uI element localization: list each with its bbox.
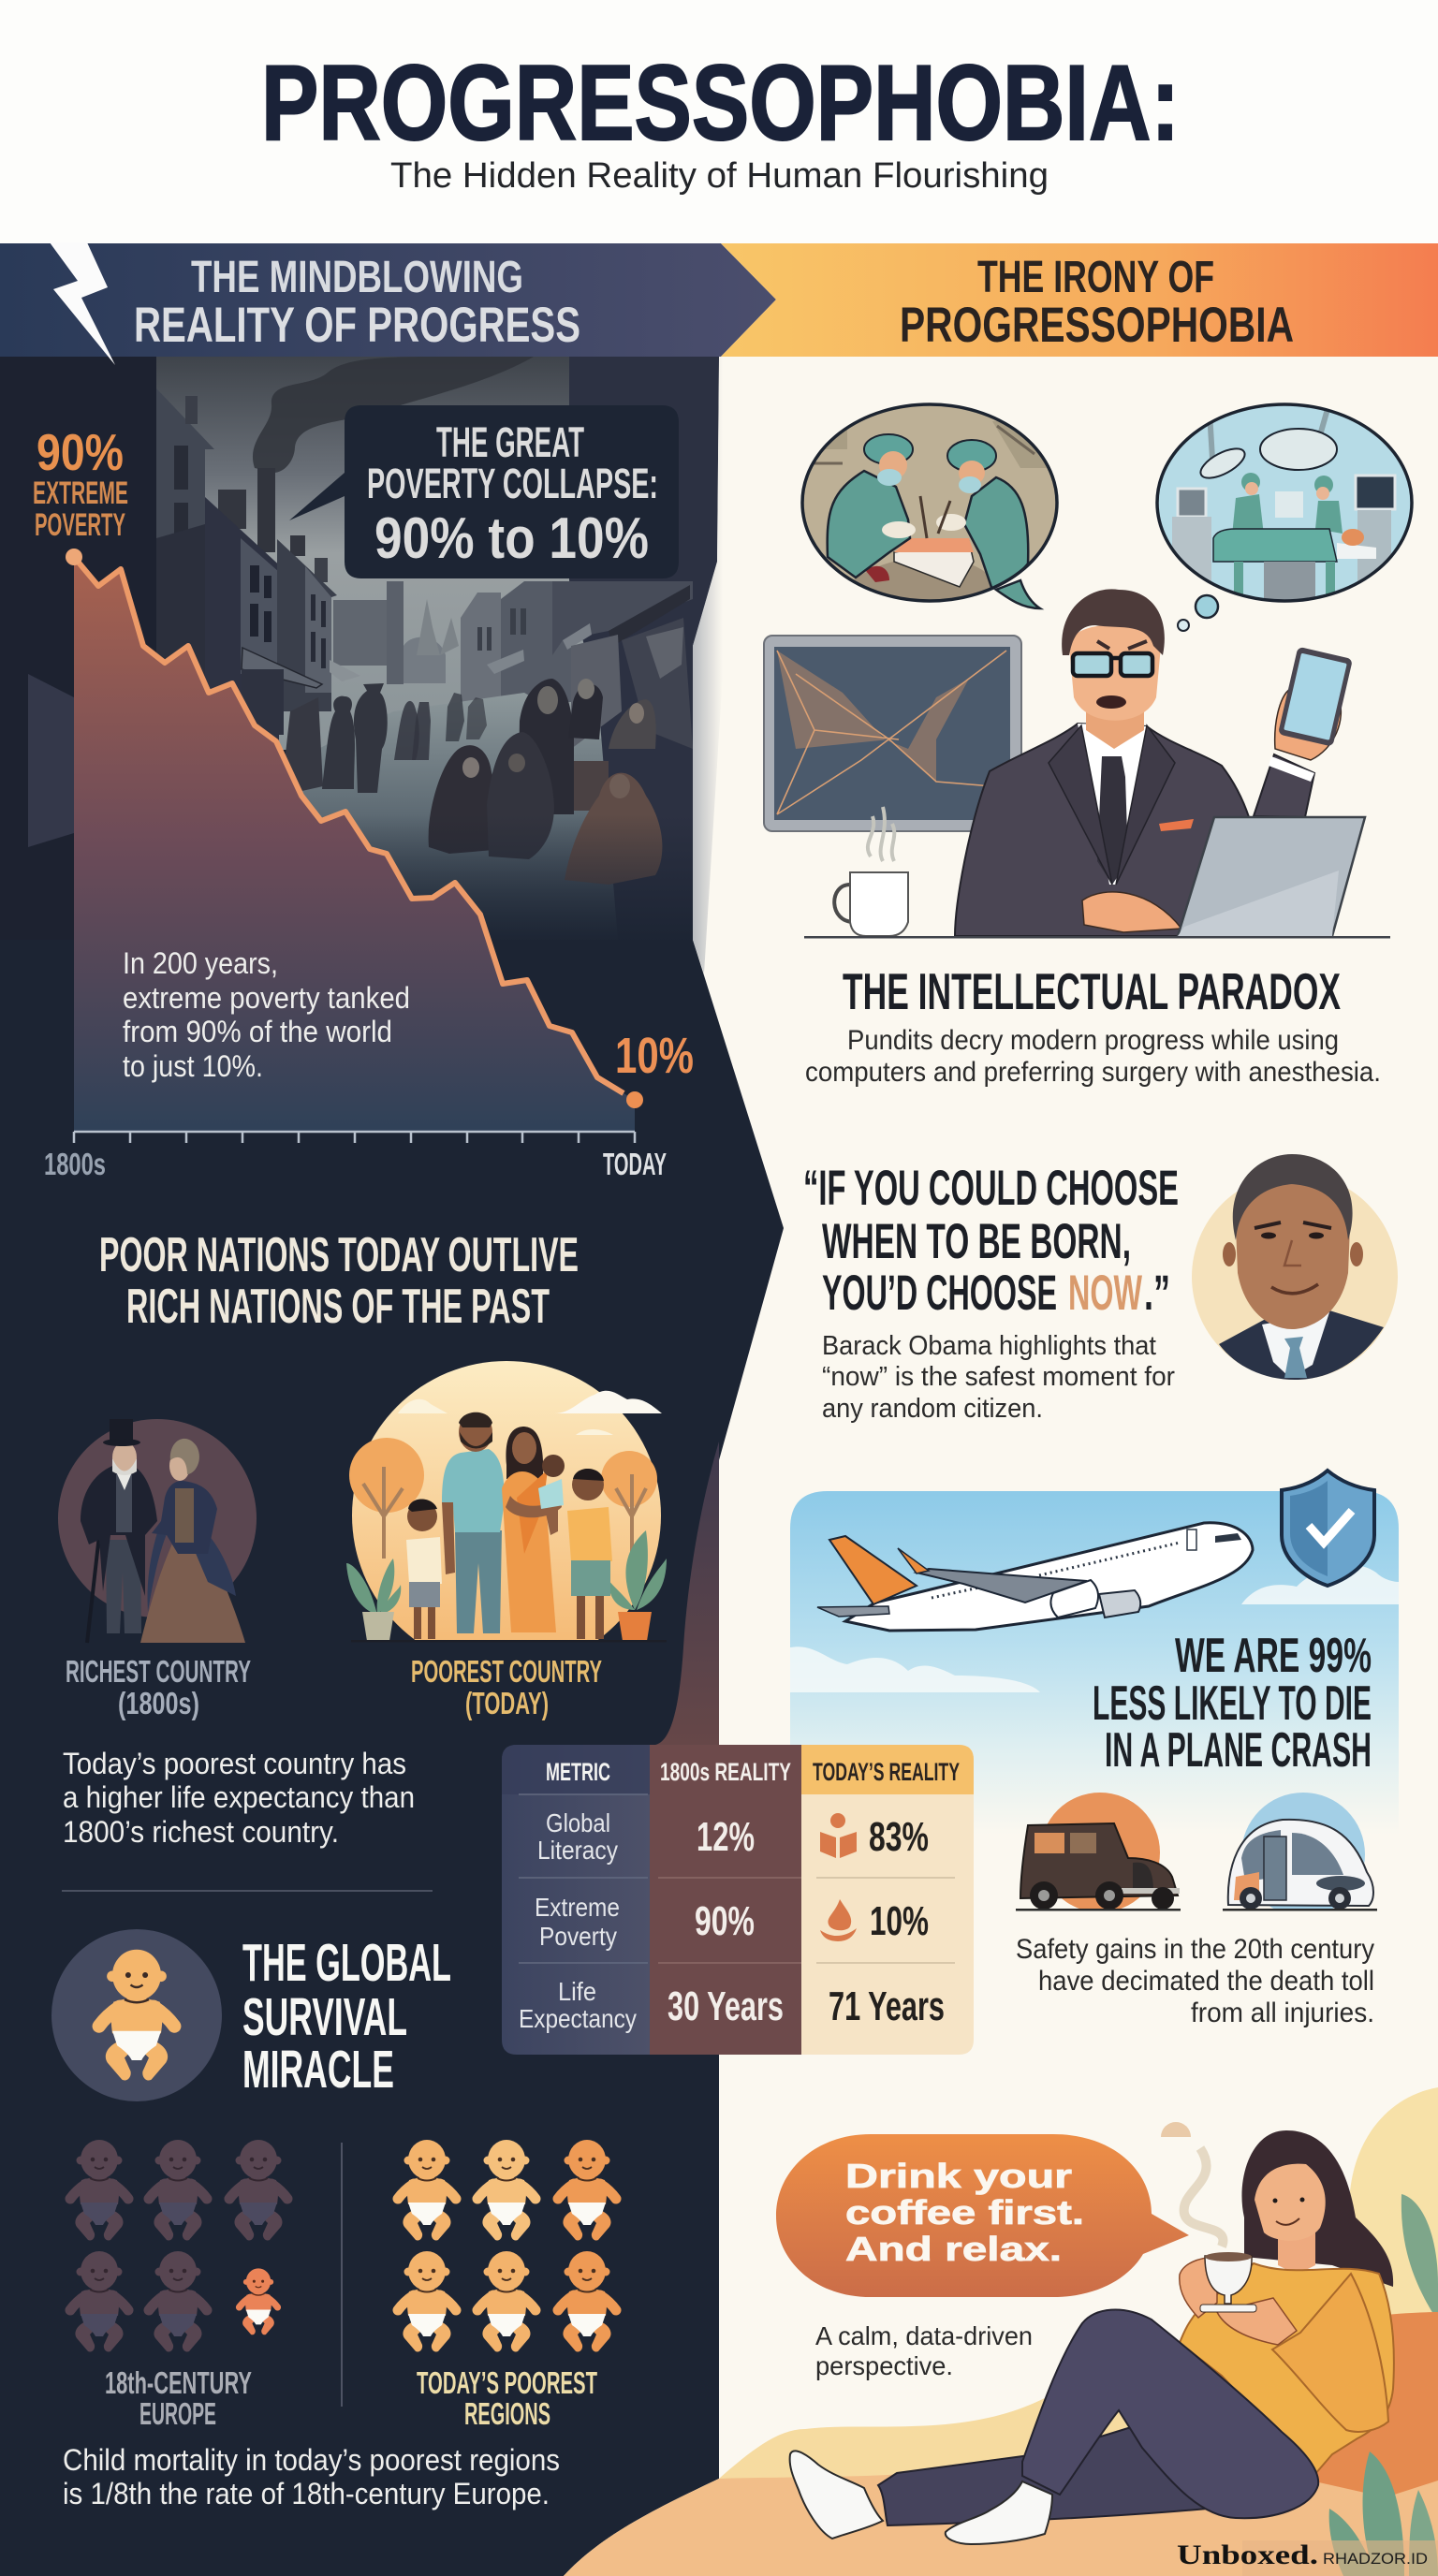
sweater [1180,2263,1394,2475]
woman [140,1535,245,1643]
text: safety gains [1016,1934,1374,2028]
portrait: obama [1192,1154,1398,1380]
surgical lamps [1208,411,1329,459]
label: 90 percent extreme poverty: 90% [37,423,124,481]
icon: baby in circle [51,1929,222,2101]
quote [803,1161,1179,1321]
mouth [1096,695,1126,709]
column: 1800s reality: 90% [695,1898,755,1944]
text: calm perspective [815,2321,1033,2380]
label: poorest country [411,1654,602,1720]
text: life expectancy comparison [63,1747,415,1849]
surgeon right [964,477,1028,601]
text: obama attribution: Barack Obama highlights that [822,1331,1156,1361]
text: child mortality [63,2443,560,2510]
text: life expectancy comparison: Today’s poorest country has [63,1747,406,1780]
header band: right [721,243,1438,357]
hands [1180,2258,1217,2318]
speech bubble: drink your coffee [776,2134,1189,2297]
background plant [1401,2194,1438,2321]
icon grid: 18th-century babies [70,2140,287,2352]
column: today's reality: 83% [869,1814,929,1860]
pedestrians [322,683,487,793]
text: child mortality: Child mortality in today’s poorest regions [63,2443,560,2477]
speech bubble: drink your coffee: coffee first. [845,2193,1084,2232]
steam [1184,2148,1223,2247]
tail fin [829,1536,917,1604]
chart area [74,557,635,1132]
phone [1278,647,1353,747]
hand [1275,688,1341,760]
mauve connector [655,1442,719,1745]
quote: YOU’D CHOOSE [822,1266,1057,1321]
coffee cup [834,807,908,936]
label: richest country: (1800s) [118,1686,199,1720]
illustration: frustrated pundit at desk [764,589,1390,938]
icon: book reader [820,1813,857,1858]
text: safety gains: Safety gains in the 20th century [1016,1934,1374,1965]
text: pundits: Pundits decry modern progress while using [847,1025,1339,1056]
shirt and tie [1078,724,1147,885]
header band: left [0,243,776,357]
smoke [253,357,534,473]
icon grid: today's babies [398,2140,616,2352]
hair [1241,2130,1393,2287]
label: 90 percent extreme poverty [33,423,128,543]
watermark: RHADZOR.ID [1323,2550,1428,2568]
callout: great poverty collapse: 90% to 10% [374,506,649,571]
quote: NOW [1068,1266,1142,1321]
label: 18th-century europe [105,2365,252,2431]
heading: poor nations: POOR NATIONS TODAY OUTLIVE [99,1228,579,1282]
trees [349,1438,424,1513]
desk [804,936,1390,938]
left building 1 [156,389,214,538]
thought dots [1178,595,1218,631]
ground line [351,1640,667,1642]
fade to dark at base of scene [362,830,693,940]
column: metric [502,1745,650,2055]
stabilizer [817,1606,889,1617]
speech bubble: drink your coffee: Drink your [845,2157,1072,2195]
illustration: wealthy 1800s couple [58,1419,257,1643]
wing [917,1569,1087,1603]
start point [66,549,82,565]
speech bubble: old surgery [796,404,1058,608]
column: 1800s reality: 12% [697,1814,755,1860]
arm raised [1254,754,1314,817]
cup and saucer [1205,2256,1252,2304]
text: safety gains: from all injuries. [1191,1998,1374,2028]
man [87,1535,99,1643]
icon: lightning bolt [50,242,115,365]
column: metric: Poverty [539,1922,617,1951]
heading: poor nations [99,1228,579,1334]
face and neck [1278,2232,1315,2275]
illustration: woman relaxing with coffee [790,2122,1438,2576]
heading: irony of progressophobia: THE IRONY OF [977,253,1214,302]
chart line [74,557,624,1093]
surgeon left [828,471,910,578]
heading: 99 percent less likely [1093,1629,1372,1778]
heading: global survival miracle [242,1933,451,2100]
comparison table [502,1745,974,2055]
axis [74,1132,635,1143]
heading: mindblowing reality [134,253,580,353]
text: obama attribution: any random citizen. [822,1394,1043,1424]
left dark panel background [0,357,784,2576]
quote: .” [1144,1266,1170,1321]
column: today's reality: TODAY’S REALITY [813,1758,960,1786]
heading: irony of progressophobia [900,253,1294,353]
chart description: extreme poverty tanked [123,981,410,1015]
column: metric: Global [546,1808,610,1837]
plants [346,1559,401,1615]
engines [1099,1590,1140,1617]
huddled people [429,679,662,885]
subtitle: The Hidden Reality of Human Flourishing [390,156,1049,196]
street [302,693,616,919]
heading: global survival miracle: THE GLOBAL [242,1933,451,1993]
thought bubble: modern surgery [1157,402,1412,604]
column: metric: METRIC [546,1758,610,1786]
heading: global survival miracle: MIRACLE [242,2040,394,2100]
label: today's poorest regions: TODAY’S POOREST [417,2365,597,2400]
label: 90 percent extreme poverty: POVERTY [35,507,125,543]
text: pundits: computers and preferring surgery with anesthesia. [805,1057,1381,1088]
awnings and shops [242,648,322,688]
label: 10 percent: 10% [615,1028,694,1084]
watermark: Unboxed. [1177,2539,1318,2570]
illustration: vintage car [1016,1793,1181,1912]
neck and head [1086,697,1144,749]
label: 18th-century europe: 18th-CENTURY [105,2365,252,2400]
column: metric: Life [558,1977,596,2006]
father [455,1530,502,1633]
pillow [1311,2312,1438,2497]
column: 1800s reality: 30 Years [668,1983,784,2029]
distant town [404,637,446,683]
column: 1800s reality: 1800s REALITY [660,1758,791,1786]
chart description: In 200 years, [123,946,278,980]
text: obama attribution: “now” is the safest moment for [822,1362,1175,1392]
icon: safety shield [1282,1471,1374,1586]
lower leg [878,2428,1236,2525]
heading: poor nations: RICH NATIONS OF THE PAST [126,1280,550,1334]
column: today's reality: 71 Years [829,1983,945,2029]
scene: industrial slum street [0,357,730,945]
laptop [1178,817,1365,936]
column: today's reality [801,1745,974,2055]
text: life expectancy comparison: a higher life expectancy than [63,1780,415,1814]
table [1213,529,1337,562]
heading: mindblowing reality: THE MINDBLOWING [191,253,523,302]
watermark [1177,2539,1438,2576]
column: 1800s reality [650,1745,801,2055]
column: metric: Literacy [537,1836,618,1865]
chart description: from 90% of the world [123,1015,392,1048]
right buildings [569,357,719,940]
main title: PROGRESSOPHOBIA: [261,44,1180,163]
market stall [286,698,323,791]
heading: global survival miracle: SURVIVAL [242,1987,407,2047]
column: today's reality: 10% [870,1898,929,1944]
monitors [1178,489,1206,517]
end point [626,1091,643,1108]
illustration: modern autonomous car [1223,1793,1377,1916]
poverty line chart [33,423,694,1181]
monitor [764,636,1021,831]
text: safety gains: have decimated the death toll [1038,1966,1374,1997]
raised arm sleeve [1272,2274,1388,2432]
baby [542,1455,565,1477]
label: richest country [66,1654,251,1720]
clouds [554,1391,662,1413]
label: today's poorest regions [417,2365,597,2431]
girl child [407,1501,437,1531]
label: 90 percent extreme poverty: EXTREME [33,476,128,511]
boy child [572,1469,604,1500]
illustration: poor country family today [346,1361,667,1670]
panel: plane safety sky [790,1491,1399,1835]
faint window on far left [28,674,74,847]
speech bubble: drink your coffee: And relax. [845,2230,1062,2268]
text: life expectancy comparison: 1800’s richest country. [63,1815,339,1849]
chimneys [257,468,275,552]
chart description [123,946,410,1083]
column: metric: Extreme [535,1893,620,1922]
panel edge shading [693,357,723,973]
staff [1232,494,1264,528]
quote: WHEN TO BE BORN, [822,1214,1131,1269]
text: calm perspective: A calm, data-driven [815,2321,1033,2350]
icon: flame in hand [820,1899,857,1941]
suit [955,724,1283,936]
label: today: TODAY [603,1147,667,1181]
heading: irony of progressophobia: PROGRESSOPHOBIA [900,298,1294,353]
left building 3 [277,539,337,711]
clouds in sky panel [790,1565,1399,1692]
text: obama attribution [822,1331,1175,1424]
socks [790,2451,883,2539]
raised leg [1022,2309,1318,2518]
label: poorest country: POOREST COUNTRY [411,1654,602,1689]
mother [506,1427,543,1479]
glasses [1073,653,1152,676]
label: richest country: RICHEST COUNTRY [66,1654,251,1689]
title block [261,44,1180,196]
quote: “IF YOU COULD CHOOSE [803,1161,1179,1216]
label: 18th-century europe: EUROPE [139,2396,216,2431]
chart description: to just 10%. [123,1049,263,1083]
column: metric: Expectancy [519,2004,637,2033]
label: today's poorest regions: REGIONS [464,2396,550,2431]
illustration: airplane [817,1523,1253,1631]
text: pundits [805,1025,1381,1088]
text: child mortality: is 1/8th the rate of 18th-century Europe. [63,2477,550,2510]
heading: mindblowing reality: REALITY OF PROGRESS [134,298,580,353]
label: poorest country: (TODAY) [465,1686,549,1720]
text: calm perspective: perspective. [815,2351,953,2380]
foreground plant [1363,2452,1404,2576]
left building 2 [205,497,285,749]
callout: great poverty collapse [289,405,679,578]
typing hand [1082,892,1181,932]
label: 1800s: 1800s [44,1147,106,1181]
hills and ground [564,2087,1438,2576]
patient [854,562,990,599]
callout: great poverty collapse: THE GREAT [436,418,584,466]
callout: great poverty collapse: POVERTY COLLAPSE: [367,460,658,507]
windows [932,1543,1180,1598]
